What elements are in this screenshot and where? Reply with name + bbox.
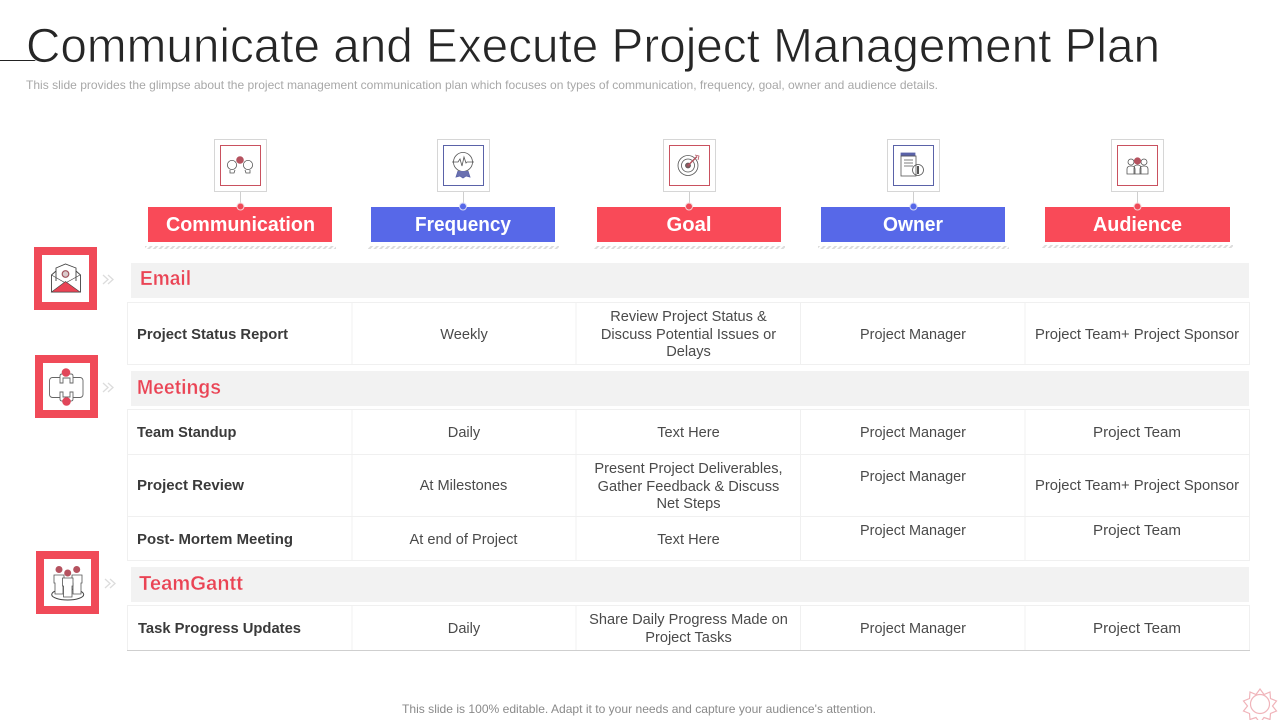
column header: Owner [818,140,1009,249]
row: Project Review: Gather Feedback & Discuss [598,479,779,495]
row: Task Progress Updates: Task Progress Updates [138,621,301,637]
icon: award with pulse [452,152,474,178]
row: Project Review: Project Team+ Project Sponsor [1035,478,1239,494]
icon: audience group [1127,158,1148,174]
section band: Meetings: Meetings [137,377,221,399]
row: Project Status Report: Weekly [440,327,488,343]
icon: meetings [39,359,94,414]
icon: two heads talking [227,157,253,173]
section band: Meetings [131,371,1249,406]
arrow: team [105,579,115,588]
row: Post-Mortem Meeting: Post- Mortem Meeting [137,532,293,548]
row: Project Status Report: Delays [666,344,711,360]
column header: Audience [1042,140,1233,248]
column header: Goal: Goal [666,214,712,236]
row: Task Progress Updates: Share Daily Progress Made on [589,612,788,628]
column header: Audience: Audience [1093,214,1182,236]
section band: Email [131,263,1249,298]
icon: office building with person [901,153,924,176]
row: Team Standup: Daily [448,425,481,441]
section band: TeamGantt [131,567,1249,602]
row: Post-Mortem Meeting: Project Manager [860,523,966,539]
column header: Communication: Communication [166,214,315,236]
row: Project Status Report: Review Project Status & [610,309,767,325]
icon: team [40,555,95,610]
row: Project Status Report: Discuss Potential Issues or [601,327,776,343]
row: Project Status Report: Project Status Report [137,327,288,343]
row: Project Review: Net Steps [656,496,721,512]
column header: Goal [594,140,785,249]
section band: TeamGantt: TeamGantt [139,573,243,595]
column header: Communication [145,140,336,249]
row: Project Status Report: Project Manager [860,327,966,343]
row: Task Progress Updates: Project Tasks [645,630,732,646]
row: Team Standup: Team Standup [137,425,237,441]
row: Project Review: Present Project Deliverables, [594,461,783,477]
row: Team Standup: Project Manager [860,425,966,441]
row: Task Progress Updates: Project Team [1093,621,1181,637]
row: Post-Mortem Meeting: Text Here [657,532,720,548]
column header: Owner: Owner [883,214,943,236]
row: Team Standup [128,409,1250,454]
section band: Email: Email [140,268,191,290]
row: Project Status Report: Project Team+ Project Sponsor [1035,327,1239,343]
column header: Frequency: Frequency [415,214,512,236]
row: Project Review: Project Review [137,478,245,494]
column header: Frequency [368,140,559,249]
row: Team Standup: Project Team [1093,425,1181,441]
arrow: email [103,275,113,284]
row: Post-Mortem Meeting: Project Team [1093,523,1181,539]
row: Project Review: At Milestones [420,478,507,494]
row: Post-Mortem Meeting: At end of Project [410,532,517,548]
row: Project Review: Project Manager [860,469,966,485]
arrow: meetings [103,383,113,392]
row: Post-Mortem Meeting [128,516,1250,560]
row: Project Status Report [128,302,1250,364]
icon: gear logo [1244,689,1276,720]
icon: email [38,251,93,306]
row: Task Progress Updates [127,605,1250,650]
title: Communicate and Execute Project Management Plan [26,20,1160,73]
table [127,263,1250,650]
row: Project Review [128,454,1250,516]
row: Team Standup: Text Here [657,425,720,441]
row: Task Progress Updates: Daily [448,621,481,637]
row: Task Progress Updates: Project Manager [860,621,966,637]
icon: target with dart [678,155,699,176]
footer note: This slide is 100% editable. Adapt it to your needs and capture your audience's attention. [402,702,876,716]
subtitle: This slide provides the glimpse about the project management communication plan which focuses on types of communication, frequency, goal, owner and audience details. [26,78,938,92]
